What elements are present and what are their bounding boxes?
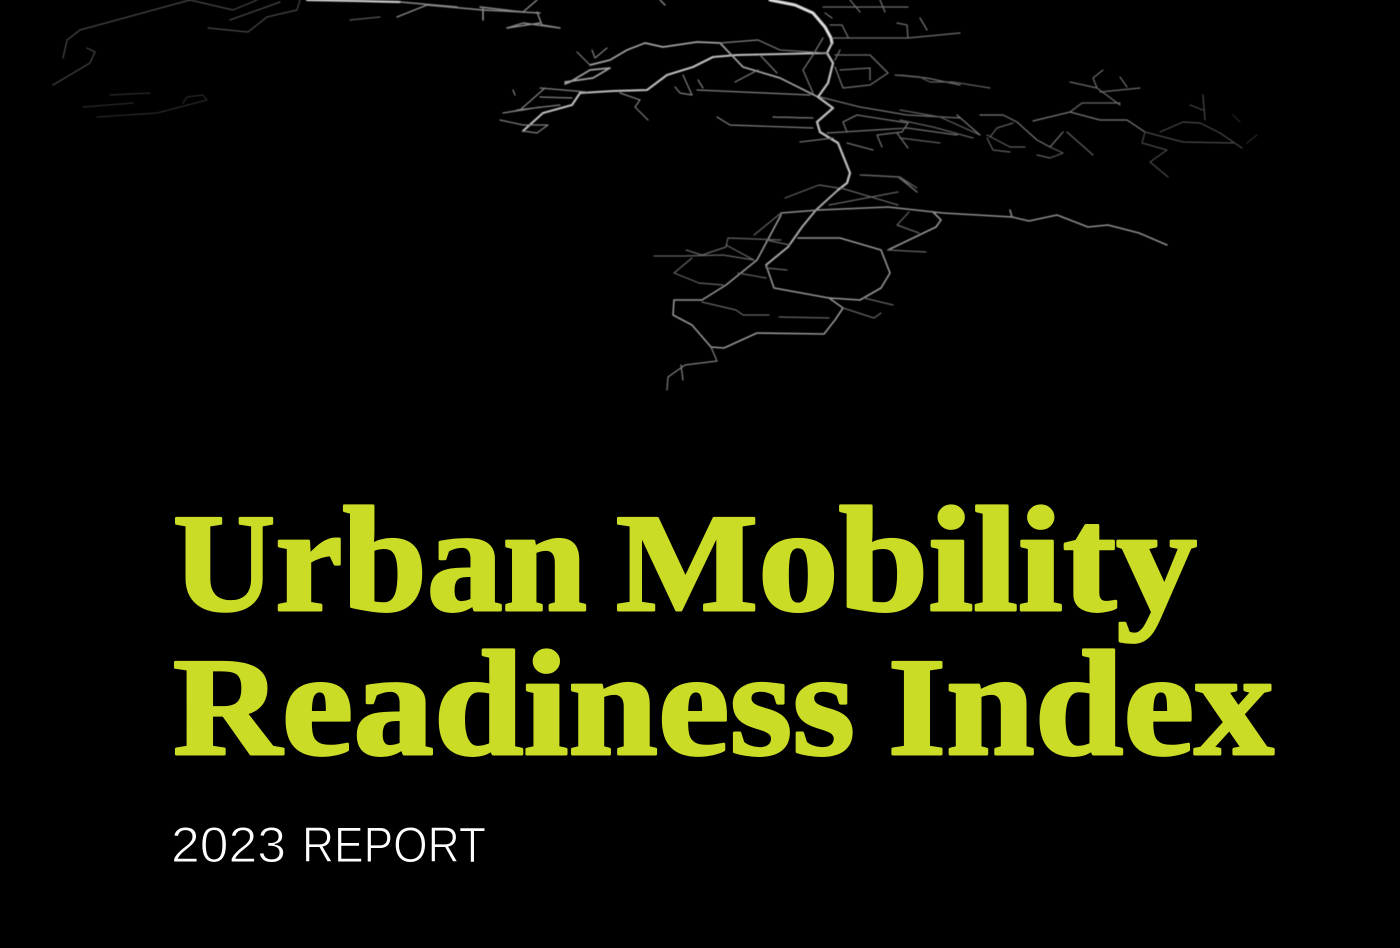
road network map — [53, 0, 1257, 390]
eastern long road — [781, 207, 1167, 245]
western branch roads — [500, 40, 827, 133]
title — [173, 477, 1274, 787]
far-west faint roads — [53, 0, 380, 117]
central local streets — [758, 0, 960, 192]
eastern fading roads — [900, 70, 1257, 188]
subtitle — [171, 817, 486, 873]
top-edge road — [307, 0, 665, 28]
central trunk road — [766, 0, 850, 265]
title line 2: Index — [888, 621, 1274, 787]
subtitle: REPORT — [302, 817, 486, 873]
title line 1: Urban — [173, 477, 587, 643]
subtitle: 2023 — [171, 817, 286, 873]
title line 1 — [173, 477, 1197, 643]
southern road loops — [654, 175, 941, 390]
title line 2: Readiness — [173, 621, 855, 787]
title line 2 — [173, 621, 1274, 787]
title line 1: Mobility — [616, 477, 1197, 643]
